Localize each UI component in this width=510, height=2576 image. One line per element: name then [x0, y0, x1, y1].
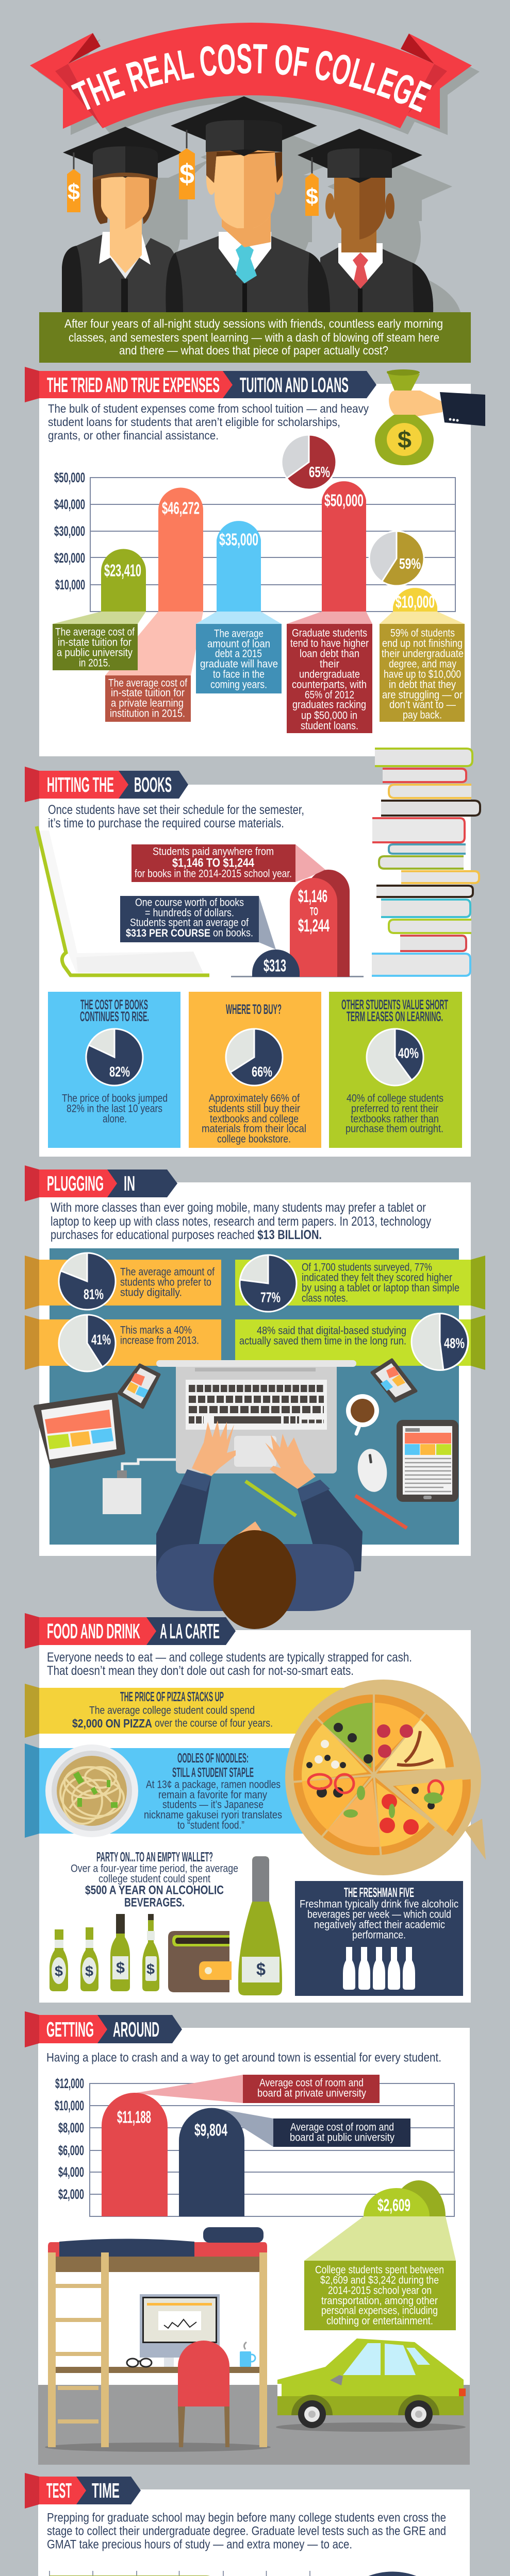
pie: 66%: 66% — [252, 1063, 272, 1080]
bar chart: tuition and debt: $40,000 — [54, 497, 85, 512]
bar: lower book cost: TO — [310, 905, 318, 918]
bar: transport low: $2,609 — [377, 2196, 410, 2214]
callout: public room and board — [221, 2109, 410, 2147]
icon: mouse — [355, 1447, 390, 1494]
title: THE REAL COST OF COLLEGE — [71, 43, 432, 112]
section ribbon: HITTING THE — [47, 773, 114, 796]
section ribbon: FOOD AND DRINK — [47, 1619, 140, 1643]
callout: transportation: clothing or entertainment. — [326, 2315, 433, 2327]
pie: 65% — [282, 435, 336, 489]
card: cost of books: The price of books jumped — [62, 1092, 168, 1105]
callout: private tuition: in-state tuition for — [111, 687, 185, 699]
stat ribbon: 81%: 81% — [84, 1286, 104, 1302]
stat ribbon: 77%: class notes. — [302, 1292, 348, 1304]
callout: private tuition: institution in 2015. — [110, 708, 185, 719]
intro text: Prepping for graduate school may begin before many college students even cross the — [47, 2511, 446, 2524]
section ribbon — [25, 367, 376, 402]
card: cost of books: CONTINUES TO RISE. — [80, 1009, 149, 1024]
bar: public housing: $9,804 — [194, 2121, 227, 2139]
bar chart: housing and transport: $2,000 — [58, 2187, 84, 2202]
intro text: purchases for educational purposes reached $13 BILLION. — [51, 1228, 322, 1242]
stat ribbon: 41%: increase from 2013. — [120, 1334, 199, 1347]
callout: graduate debt: tend to have higher — [290, 638, 369, 649]
callout: non-finishers: degree, and may — [389, 658, 456, 670]
callout: public tuition: a public university — [57, 647, 133, 658]
bar chart: tuition and debt: $50,000 — [54, 470, 85, 485]
panel: hitting the books — [25, 767, 471, 1157]
intro text: GMAT take precious hours of study — and extra money — to ace. — [47, 2538, 352, 2551]
card: short term leases: 40% of college students — [347, 1092, 443, 1105]
section ribbon: PLUGGING — [47, 1172, 104, 1195]
callout: non-finishers: 59% of students — [390, 628, 455, 639]
callout: loan debt: amount of loan — [207, 638, 270, 650]
bar chart: housing and transport: $8,000 — [58, 2120, 84, 2136]
student from above — [156, 1420, 363, 1629]
stat ribbon: 77%: indicated they felt they scored higher — [302, 1272, 452, 1284]
illustration: car — [276, 2338, 466, 2432]
callout: loan debt: graduate will have — [200, 658, 278, 670]
text: party on: $500 A YEAR ON ALCOHOLIC — [85, 1884, 224, 1897]
intro text: The bulk of student expenses come from school tuition — and heavy — [48, 402, 369, 415]
pie: 59%: 59% — [399, 556, 421, 572]
bar chart: tuition and debt: $10,000 — [55, 577, 85, 592]
icon: dollar tag: $ — [306, 184, 318, 209]
icon: stack of books — [372, 749, 480, 976]
right ribbon tail — [400, 33, 472, 129]
graduate: man centre — [166, 96, 330, 312]
intro text: With more classes than ever going mobile, many students may prefer a tablet or — [51, 1200, 426, 1215]
callout: graduate debt: student loans. — [301, 720, 358, 732]
text: party on: college student could spent — [98, 1873, 210, 1885]
intro text: stage to collect their undergraduate degree. Graduate level tests such as the GRE and — [47, 2524, 446, 2538]
intro text: Having a place to crash and a way to get around town is essential for every student. — [46, 2050, 441, 2065]
bottle 1 — [50, 1929, 68, 1991]
icon: graded test paper — [325, 2572, 460, 2576]
blue ribbon: noodles: STILL A STUDENT STAPLE — [172, 1765, 254, 1780]
intro box: and there — what does that piece of paper actually cost? — [119, 344, 388, 357]
bar: private tuition: $46,272 — [162, 499, 200, 517]
figure shadows — [142, 135, 460, 312]
yellow ribbon: pizza: THE PRICE OF PIZZA STACKS UP — [120, 1689, 224, 1704]
callout: book spending: Students paid anywhere from — [153, 846, 274, 857]
bar: upper book cost — [307, 870, 350, 977]
stat ribbon: 81%: study digitally. — [120, 1287, 182, 1298]
card: cost of books: THE COST OF BOOKS — [80, 997, 148, 1012]
section ribbon — [25, 767, 188, 802]
blue ribbon: noodles: At 13¢ a package, ramen noodles — [146, 1778, 281, 1791]
icon: dollar tag — [67, 169, 80, 212]
left hand — [192, 1420, 236, 1476]
intro text — [48, 402, 369, 442]
section ribbon: A LA CARTE — [160, 1619, 220, 1643]
bar: lower book cost: $1,146 — [298, 887, 327, 906]
icon: hand holding money bag — [375, 369, 485, 465]
callout: transportation: College students spent between — [315, 2264, 444, 2276]
card: where to buy: Approximately 66% of — [209, 1092, 300, 1105]
callout: graduate debt: counterparts, with — [292, 679, 367, 690]
bar: loan debt — [217, 521, 261, 612]
section ribbon: BOOKS — [134, 773, 172, 796]
callout: non-finishers: their undergraduate — [382, 648, 464, 659]
left ribbon tail — [30, 33, 103, 129]
callout: public room and board: Average cost of room and — [290, 2122, 394, 2133]
icon: dollar tag — [179, 148, 195, 199]
section ribbon — [25, 1613, 236, 1649]
monitor — [140, 2294, 220, 2367]
icon: red pencil — [355, 1496, 407, 1528]
stat ribbon: 41%: This marks a 40% — [120, 1324, 192, 1336]
bottle 3: $ — [116, 1960, 125, 1976]
callout: public tuition: in-state tuition for — [58, 637, 131, 648]
glasses — [127, 2359, 152, 2367]
text: party on: BEVERAGES. — [124, 1896, 185, 1909]
bar chart: tuition and debt: $20,000 — [54, 550, 85, 566]
callout: public tuition: in 2015. — [79, 657, 110, 669]
bottle 3 — [110, 1914, 130, 1991]
mug — [240, 2342, 255, 2367]
intro box — [39, 312, 471, 363]
pie: 65%: 65% — [309, 464, 330, 481]
section ribbon — [25, 2011, 182, 2047]
panel: test time — [25, 2473, 470, 2576]
icon: charger — [103, 1460, 176, 1514]
blue ribbon: noodles: OODLES OF NOODLES: — [177, 1750, 249, 1766]
intro text: Once students have set their schedule for the semester, — [48, 803, 304, 817]
callout: public tuition: The average cost of — [55, 626, 135, 638]
callout: private tuition — [105, 612, 203, 722]
icon: bottles and wallet — [50, 1856, 282, 1995]
stat ribbon: 77%: Of 1,700 students surveyed, 77% — [302, 1261, 432, 1274]
card: where to buy: students still buy their — [208, 1103, 300, 1115]
wallet — [168, 1931, 232, 1992]
bar: private housing: $11,188 — [117, 2107, 151, 2127]
bar chart: housing and transport: $6,000 — [58, 2143, 84, 2158]
card: where to buy: textbooks and college — [210, 1113, 299, 1125]
bar chart: housing and transport: $12,000 — [55, 2076, 84, 2091]
stat ribbon: 41% — [25, 1315, 221, 1371]
intro text: That doesn’t mean they don’t dole out cash for not-so-smart eats. — [47, 1664, 354, 1678]
box: freshman five: THE FRESHMAN FIVE — [344, 1885, 414, 1900]
bar chart: test fees — [50, 2571, 318, 2576]
callout: graduate debt: 65% of 2012 — [305, 689, 354, 701]
stat ribbon: 77%: by using a tablet or laptop than simple — [302, 1282, 459, 1294]
icon: right tablet — [397, 1420, 458, 1502]
stat ribbon: 77% — [235, 1255, 485, 1312]
panel: getting around — [25, 2011, 470, 2465]
bottle 2: $ — [85, 1963, 93, 1979]
box: freshman five — [295, 1881, 463, 1996]
callout: graduate debt: graduates racking — [292, 699, 366, 711]
intro text — [47, 2511, 446, 2551]
card: cost of books — [48, 992, 180, 1148]
callout: private room and board: board at private university — [257, 2088, 366, 2099]
intro box: classes, and semesters spent learning — with a dash of blowing off steam here — [69, 331, 439, 344]
stat ribbon: 77%: 77% — [260, 1289, 281, 1306]
yellow ribbon: pizza: over the course of four years. — [155, 1718, 273, 1729]
icon: open book — [37, 826, 209, 975]
section ribbon: AROUND — [113, 2018, 159, 2041]
callout: graduate debt: loan debt than — [300, 648, 359, 659]
pie: 82% — [86, 1029, 143, 1086]
bar: public tuition: $23,410 — [104, 561, 141, 580]
section ribbon: GETTING — [46, 2018, 94, 2041]
card: short term leases: textbooks rather than — [351, 1113, 439, 1125]
callout: transportation: $2,609 and $3,242 during the — [320, 2274, 439, 2286]
section ribbon: TIME — [92, 2479, 120, 2502]
icon: green pencil — [245, 1481, 296, 1516]
floor — [38, 2385, 470, 2465]
icon: left phone — [119, 1365, 159, 1408]
bar: graduate debt — [322, 481, 366, 612]
callout: non-finishers: end up not finishing — [382, 638, 463, 649]
right hand — [265, 1434, 316, 1489]
icon: dollar tag: $ — [68, 179, 80, 205]
bottle 2 — [80, 1927, 98, 1991]
intro text: student loans for students that aren’t eligible for scholarships, — [48, 415, 340, 429]
stat ribbon: 81%: The average amount of — [120, 1266, 215, 1278]
stat ribbon: 48%: 48% — [444, 1335, 465, 1351]
pie: 66% — [226, 1029, 283, 1086]
card: short term leases: purchase them outright. — [346, 1123, 443, 1134]
callout: private room and board — [134, 2075, 380, 2103]
box: freshman five: beverages per week — which could — [307, 1908, 451, 1921]
bar chart: housing and transport — [55, 2075, 454, 2216]
left ribbon fold — [55, 64, 103, 128]
text: party on — [71, 1849, 238, 1909]
card: where to buy: materials from their local — [202, 1123, 306, 1134]
graduate: man right — [298, 129, 433, 312]
bar: non-finishers: $10,000 — [396, 592, 435, 611]
icon: coffee cup — [346, 1394, 379, 1434]
bar: transport low — [364, 2188, 430, 2216]
intro text: laptop to keep up with class notes, research and term papers. In 2013, technology — [51, 1214, 431, 1229]
panel: plugging in — [25, 1165, 485, 1556]
section ribbon — [25, 1165, 177, 1201]
stat ribbon: 41%: 41% — [91, 1331, 111, 1348]
bar: public tuition — [101, 549, 146, 612]
panel: tuition and loans — [25, 367, 485, 756]
icon: right phone — [372, 1360, 416, 1401]
card: short term leases — [329, 992, 462, 1148]
text: party on: PARTY ON...TO AN EMPTY WALLET? — [96, 1849, 213, 1865]
bar: public housing — [179, 2108, 244, 2216]
callout: per course spending: = hundreds of dollars. — [145, 907, 234, 919]
callout: transportation: transportation, among other — [321, 2295, 438, 2307]
graduate: woman — [62, 127, 182, 312]
callout: non-finishers: have up to $10,000 — [384, 669, 461, 680]
callout: per course spending: One course worth of books — [135, 896, 244, 909]
icon: dollar tag: $ — [179, 159, 194, 190]
box: freshman five: performance. — [352, 1929, 406, 1941]
bar chart: housing and transport: $4,000 — [58, 2164, 84, 2180]
bar chart: tuition and debt — [54, 435, 455, 612]
bar: loan debt: $35,000 — [219, 530, 258, 549]
bottle 4: $ — [146, 1961, 155, 1977]
stat ribbon: 81% — [25, 1253, 221, 1310]
section ribbon — [25, 2473, 141, 2509]
card: cost of books: alone. — [103, 1113, 127, 1125]
text: party on: Over a four-year time period, the average — [71, 1863, 238, 1874]
card: where to buy — [189, 992, 321, 1148]
section ribbon: TUITION AND LOANS — [240, 373, 349, 397]
callout: non-finishers — [380, 612, 465, 722]
intro text — [47, 1650, 412, 1678]
bar: private tuition — [158, 487, 203, 612]
blue ribbon: noodles — [25, 1743, 318, 1838]
callout: public room and board: board at public university — [290, 2132, 394, 2143]
panel: food and drink — [25, 1613, 486, 2003]
bar chart: tuition and debt: $30,000 — [54, 523, 85, 539]
callout: non-finishers: don’t want to — — [389, 699, 456, 711]
teal desk — [50, 1248, 459, 1545]
callout: non-finishers: pay back. — [403, 709, 442, 721]
callout: private tuition: a private learning — [111, 698, 184, 709]
bar: per course — [252, 950, 300, 977]
callout: loan debt: coming years. — [210, 679, 267, 690]
card: cost of books: 82% in the last 10 years — [67, 1103, 162, 1115]
callout: non-finishers: in debt that they — [389, 679, 456, 690]
blue ribbon: noodles: nickname gakusei ryori translates — [144, 1809, 282, 1821]
bottle 4 — [142, 1914, 159, 1991]
callout: private tuition: The average cost of — [108, 677, 187, 689]
box: freshman five: Freshman typically drink five alcoholic — [300, 1898, 458, 1910]
stat ribbon: 48% — [235, 1314, 485, 1370]
intro text: Everyone needs to eat — and college students are typically strapped for cash. — [47, 1650, 412, 1665]
chair — [178, 2341, 229, 2447]
bar: per course: $313 — [264, 956, 286, 975]
pie: 82%: 82% — [109, 1063, 130, 1080]
callout: non-finishers: are struggling — or — [382, 689, 463, 701]
blue ribbon: noodles: students — it’s Japanese — [162, 1799, 264, 1810]
intro text — [48, 803, 304, 831]
section ribbon: IN — [124, 1172, 135, 1195]
yellow ribbon: pizza — [25, 1684, 359, 1738]
pie: 40%: 40% — [398, 1045, 419, 1061]
bar: graduate debt: $50,000 — [324, 490, 364, 510]
ribbon band — [68, 23, 434, 128]
bar: private housing — [102, 2093, 168, 2216]
callout: per course spending: $313 PER COURSE on books. — [126, 927, 253, 939]
callout: per course spending: Students spent an average of — [130, 917, 249, 928]
icon: dollar tag — [305, 173, 319, 216]
yellow ribbon: pizza: $2,000 ON PIZZA — [72, 1717, 152, 1730]
callout: transportation — [304, 2216, 456, 2330]
icon: laptop — [156, 1360, 356, 1473]
icon: noodle bowl — [45, 1744, 138, 1837]
callout: transportation: 2014-2015 school year on — [328, 2284, 432, 2297]
callout: graduate debt: up $50,000 in — [301, 710, 357, 721]
section ribbon: THE TRIED AND TRUE EXPENSES — [47, 373, 220, 397]
callout: book spending: for books in the 2014-2015 school year. — [135, 868, 292, 880]
blue ribbon: noodles: remain a favorite for many — [158, 1789, 267, 1801]
callout: loan debt — [196, 612, 282, 693]
stat ribbon: 48%: 48% said that digital-based studying — [257, 1325, 406, 1336]
pie: 40% — [367, 1029, 423, 1086]
big bottle — [238, 1856, 282, 1995]
callout: transportation: personal expenses, including — [321, 2305, 438, 2316]
callout: graduate debt: their — [320, 658, 339, 670]
right ribbon fold — [400, 64, 447, 128]
callout: loan debt: to face in the — [213, 669, 265, 680]
callout: book spending: $1,146 TO $1,244 — [172, 856, 255, 870]
callout: graduate debt: undergraduate — [299, 669, 360, 680]
intro text: grants, or other financial assistance. — [48, 429, 219, 442]
icon: hand holding money bag: $ — [398, 426, 412, 453]
pie: 59% — [369, 531, 424, 586]
callout: public tuition — [53, 612, 146, 670]
title ribbon — [30, 23, 480, 135]
bar chart: book cost — [231, 870, 364, 977]
callout: private room and board: Average cost of room and — [259, 2077, 364, 2089]
intro text: it’s time to purchase the required course materials. — [48, 816, 284, 831]
card: short term leases: preferred to rent their — [351, 1103, 438, 1115]
icon: five bottles — [343, 1947, 415, 1990]
stat ribbon: 81%: students who prefer to — [120, 1277, 211, 1288]
stat ribbon: 48%: actually saved them time in the long run. — [239, 1335, 406, 1347]
bottle 1: $ — [55, 1963, 63, 1979]
intro box: After four years of all-night study sessions with friends, countless early morning — [64, 317, 443, 330]
bar: non-finishers — [393, 588, 437, 612]
bar: transport high — [392, 2180, 446, 2216]
card: where to buy: WHERE TO BUY? — [226, 1002, 282, 1017]
section ribbon: TEST — [46, 2479, 72, 2502]
card: where to buy: college bookstore. — [217, 1133, 291, 1145]
callout: per course spending — [120, 896, 276, 950]
bar: lower book cost: $1,244 — [298, 916, 330, 936]
bar: GRE — [50, 2575, 219, 2576]
bar chart: housing and transport: $10,000 — [55, 2098, 84, 2113]
bar: lower book cost — [290, 878, 337, 977]
illustration: loft bed and desk — [45, 2227, 271, 2452]
callout: book spending — [131, 844, 325, 882]
yellow ribbon: pizza: The average college student could spend — [89, 1704, 255, 1717]
icon: left tablet — [35, 1394, 124, 1467]
callout: loan debt: The average — [214, 628, 264, 640]
intro text — [51, 1200, 431, 1242]
big bottle: $ — [256, 1960, 266, 1979]
callout: graduate debt: Graduate students — [292, 628, 367, 639]
box: freshman five: negatively affect their academic — [314, 1919, 445, 1931]
callout: loan debt: debt a 2015 — [215, 648, 262, 659]
icon: pizza — [285, 1680, 486, 1875]
blue ribbon: noodles: to “student food.” — [177, 1820, 244, 1831]
callout: graduate debt — [287, 612, 372, 733]
